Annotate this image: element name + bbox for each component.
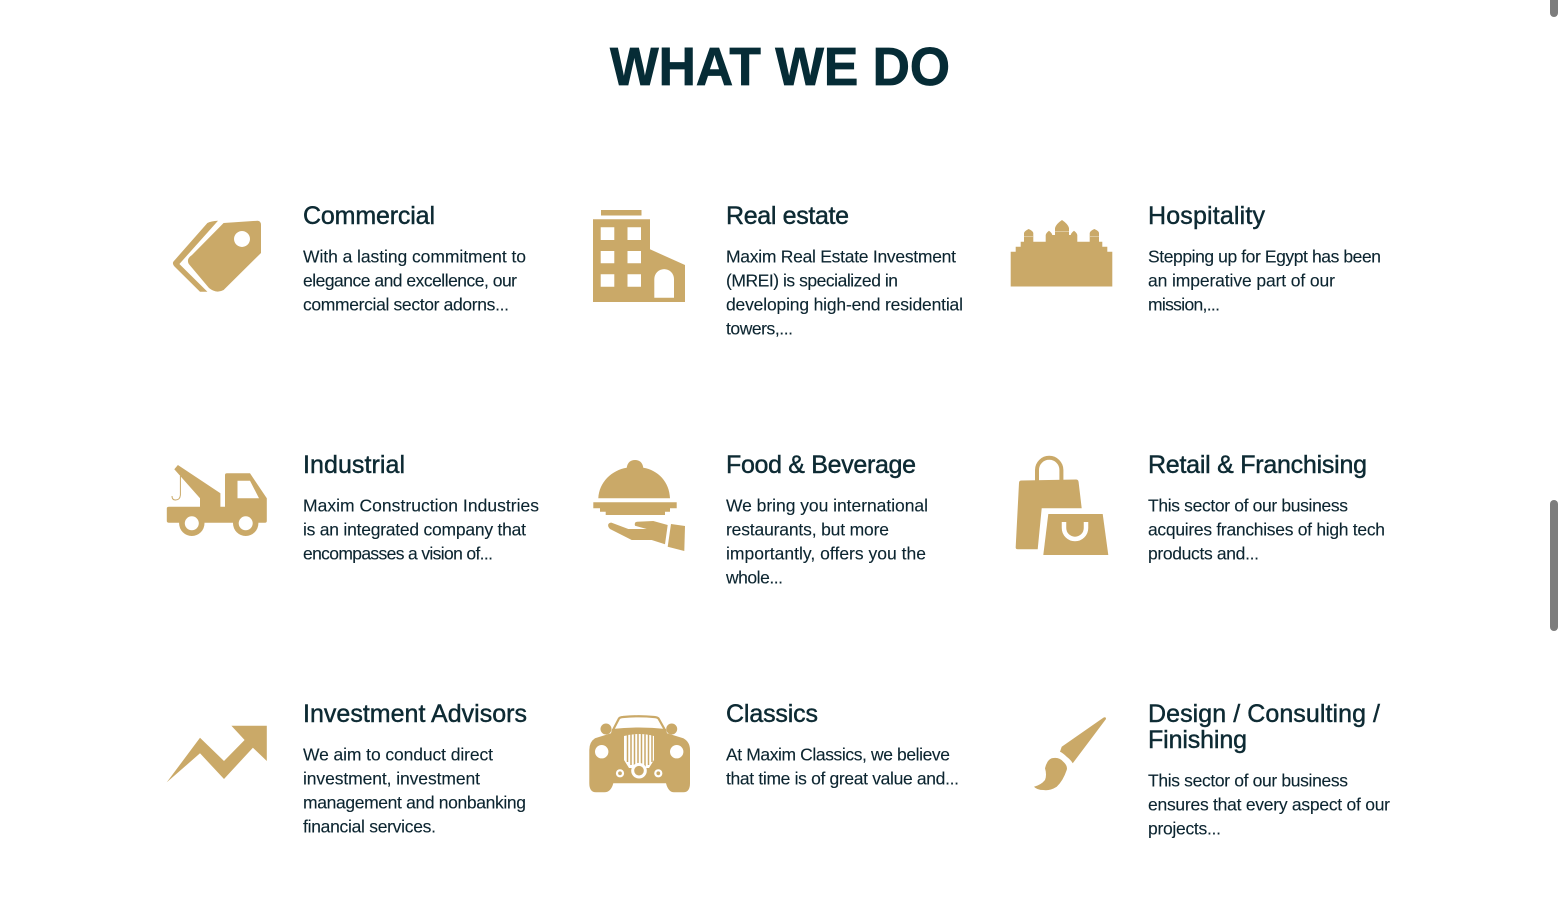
heading: design consulting finishing: Design / Consulting / — [1148, 700, 1380, 728]
text: real estate description: Maxim Real Estate Investment — [726, 247, 956, 267]
heading: industrial: Industrial — [303, 451, 405, 479]
panel: industrial — [167, 451, 539, 564]
heading: retail and franchising: Retail & Franchising — [1148, 451, 1367, 479]
heading: food and beverage: Food & Beverage — [726, 451, 916, 479]
text: retail and franchising description: products and... — [1148, 544, 1259, 564]
text: real estate description: developing high-end residential — [726, 295, 963, 315]
text: industrial description: Maxim Construction Industries — [303, 496, 539, 516]
scrollbar thumbs — [1550, 0, 1558, 631]
text: hospitality description: Stepping up for Egypt has been — [1148, 247, 1381, 267]
text: design consulting finishing description: This sector of our business — [1148, 771, 1348, 791]
icon: building — [593, 210, 685, 302]
heading: real estate: Real estate — [726, 202, 849, 230]
heading: investment advisors: Investment Advisors — [303, 700, 527, 728]
text: food and beverage description: restaurants, but more — [726, 520, 889, 540]
icon: palace skyline — [1011, 220, 1112, 286]
text: commercial description: elegance and excellence, our — [303, 271, 517, 291]
text: food and beverage description: whole... — [725, 568, 783, 588]
panel: real estate — [593, 202, 963, 339]
text: investment advisors description — [303, 745, 526, 837]
icon: paint brush — [1034, 717, 1106, 790]
text: food and beverage description: importantly, offers you the — [726, 544, 926, 564]
text: retail and franchising description: acquires franchises of high tech — [1148, 520, 1385, 540]
text: investment advisors description: financial services. — [303, 817, 436, 837]
title: WHAT WE DO — [610, 37, 950, 97]
icon: tow truck — [167, 465, 267, 536]
panel: hospitality — [1011, 202, 1381, 315]
heading: design consulting finishing — [1148, 700, 1380, 754]
icon: shopping bags — [1016, 458, 1108, 555]
heading: commercial: Commercial — [303, 202, 435, 230]
text: classics description: At Maxim Classics, we believe — [726, 745, 950, 765]
panel: design consulting finishing — [1034, 700, 1390, 839]
icon: price tag — [173, 221, 261, 292]
icon: rising arrow — [167, 726, 267, 782]
text: hospitality description: mission,... — [1148, 295, 1220, 315]
panel: food and beverage — [593, 451, 928, 588]
text: design consulting finishing description: ensures that every aspect of our — [1148, 795, 1390, 815]
text: retail and franchising description — [1148, 496, 1385, 564]
text: design consulting finishing description: projects... — [1148, 819, 1221, 839]
panel: commercial — [173, 202, 526, 315]
heading: hospitality: Hospitality — [1148, 202, 1266, 230]
text: commercial description — [303, 247, 526, 315]
text: design consulting finishing description — [1148, 771, 1390, 839]
text: real estate description: (MREI) is specialized in — [726, 271, 898, 291]
text: classics description — [726, 745, 959, 789]
text: real estate description — [726, 247, 963, 339]
panel: investment advisors — [167, 700, 527, 837]
text: food and beverage description: We bring you international — [726, 496, 928, 516]
icon: classic car — [589, 716, 690, 792]
text: industrial description — [303, 496, 539, 564]
panel: retail and franchising — [1016, 451, 1385, 564]
text: industrial description: encompasses a vision of... — [303, 544, 493, 564]
icon: serving cloche on hand — [593, 460, 685, 551]
text: investment advisors description: We aim to conduct direct — [303, 745, 493, 765]
text: classics description: that time is of great value and... — [726, 769, 959, 789]
heading: design consulting finishing: Finishing — [1148, 726, 1247, 754]
text: hospitality description: an imperative part of our — [1148, 271, 1335, 291]
text: investment advisors description: management and nonbanking — [303, 793, 526, 813]
text: industrial description: is an integrated company that — [303, 520, 526, 540]
panel: classics — [589, 700, 959, 792]
text: commercial description: With a lasting commitment to — [303, 247, 526, 267]
text: investment advisors description: investment, investment — [303, 769, 480, 789]
text: commercial description: commercial sector adorns... — [303, 295, 509, 315]
text: hospitality description — [1148, 247, 1381, 315]
text: real estate description: towers,... — [726, 319, 793, 339]
heading: classics: Classics — [726, 700, 818, 728]
text: retail and franchising description: This sector of our business — [1148, 496, 1348, 516]
text: food and beverage description — [725, 496, 928, 588]
